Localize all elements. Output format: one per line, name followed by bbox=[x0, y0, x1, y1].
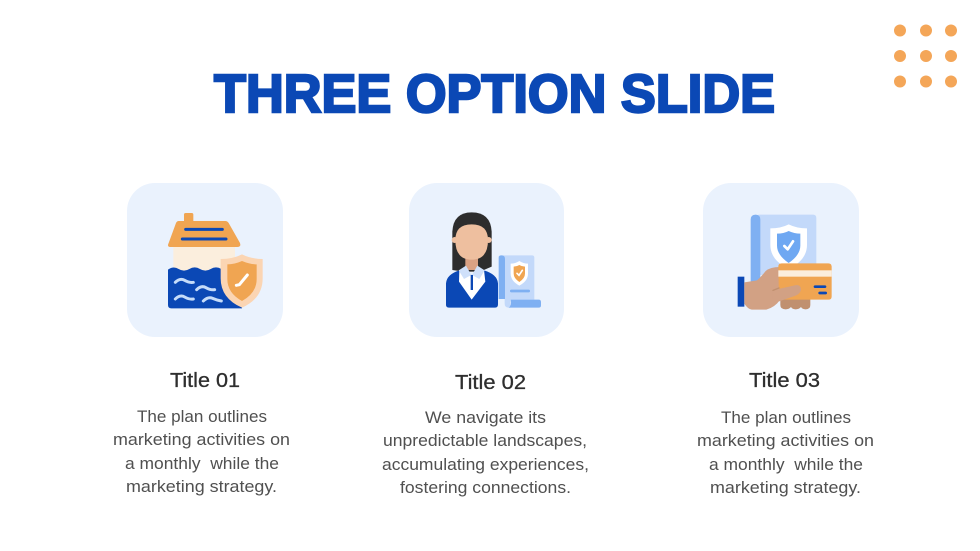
text block: option 1 description: marketing activities on bbox=[113, 430, 290, 449]
text block: option 2 description bbox=[382, 408, 589, 497]
heading: Title 01: Title 01 bbox=[170, 370, 240, 392]
icon tile 1 bbox=[127, 183, 283, 337]
text block: option 3 description: marketing activities on bbox=[697, 431, 874, 450]
text block: option 2 description: fostering connections. bbox=[400, 478, 571, 497]
icon tile 3 bbox=[703, 183, 859, 337]
panel: option 3 bbox=[697, 183, 874, 497]
text block: option 3 description: The plan outlines bbox=[721, 408, 851, 427]
text block: option 1 description: The plan outlines bbox=[137, 407, 267, 426]
icon: hand holding card in front of policy book bbox=[738, 215, 832, 310]
text block: option 3 description: a monthly while the bbox=[709, 455, 863, 474]
panel: option 2 bbox=[382, 183, 589, 497]
text block: option 1 description: marketing strategy. bbox=[126, 477, 277, 496]
icon tile 2 bbox=[409, 183, 564, 337]
text block: option 3 description: marketing strategy. bbox=[710, 478, 861, 497]
heading: Title 03: Title 03 bbox=[749, 370, 820, 392]
text block: option 2 description: accumulating experiences, bbox=[382, 455, 589, 474]
panel: option 1 bbox=[113, 183, 290, 496]
text block: option 1 description: a monthly while the bbox=[125, 454, 279, 473]
text block: option 3 description bbox=[697, 408, 874, 497]
heading: Title 02: Title 02 bbox=[455, 372, 526, 394]
text block: option 2 description: We navigate its bbox=[425, 408, 546, 427]
icon: flooded house with shield bbox=[168, 213, 263, 308]
text block: option 1 description bbox=[113, 407, 290, 496]
title: THREE OPTION SLIDE bbox=[214, 64, 775, 124]
decorative dot grid bbox=[894, 24, 957, 88]
icon: insurance agent with policy document bbox=[446, 212, 541, 308]
text block: option 2 description: unpredictable landscapes, bbox=[383, 431, 587, 450]
